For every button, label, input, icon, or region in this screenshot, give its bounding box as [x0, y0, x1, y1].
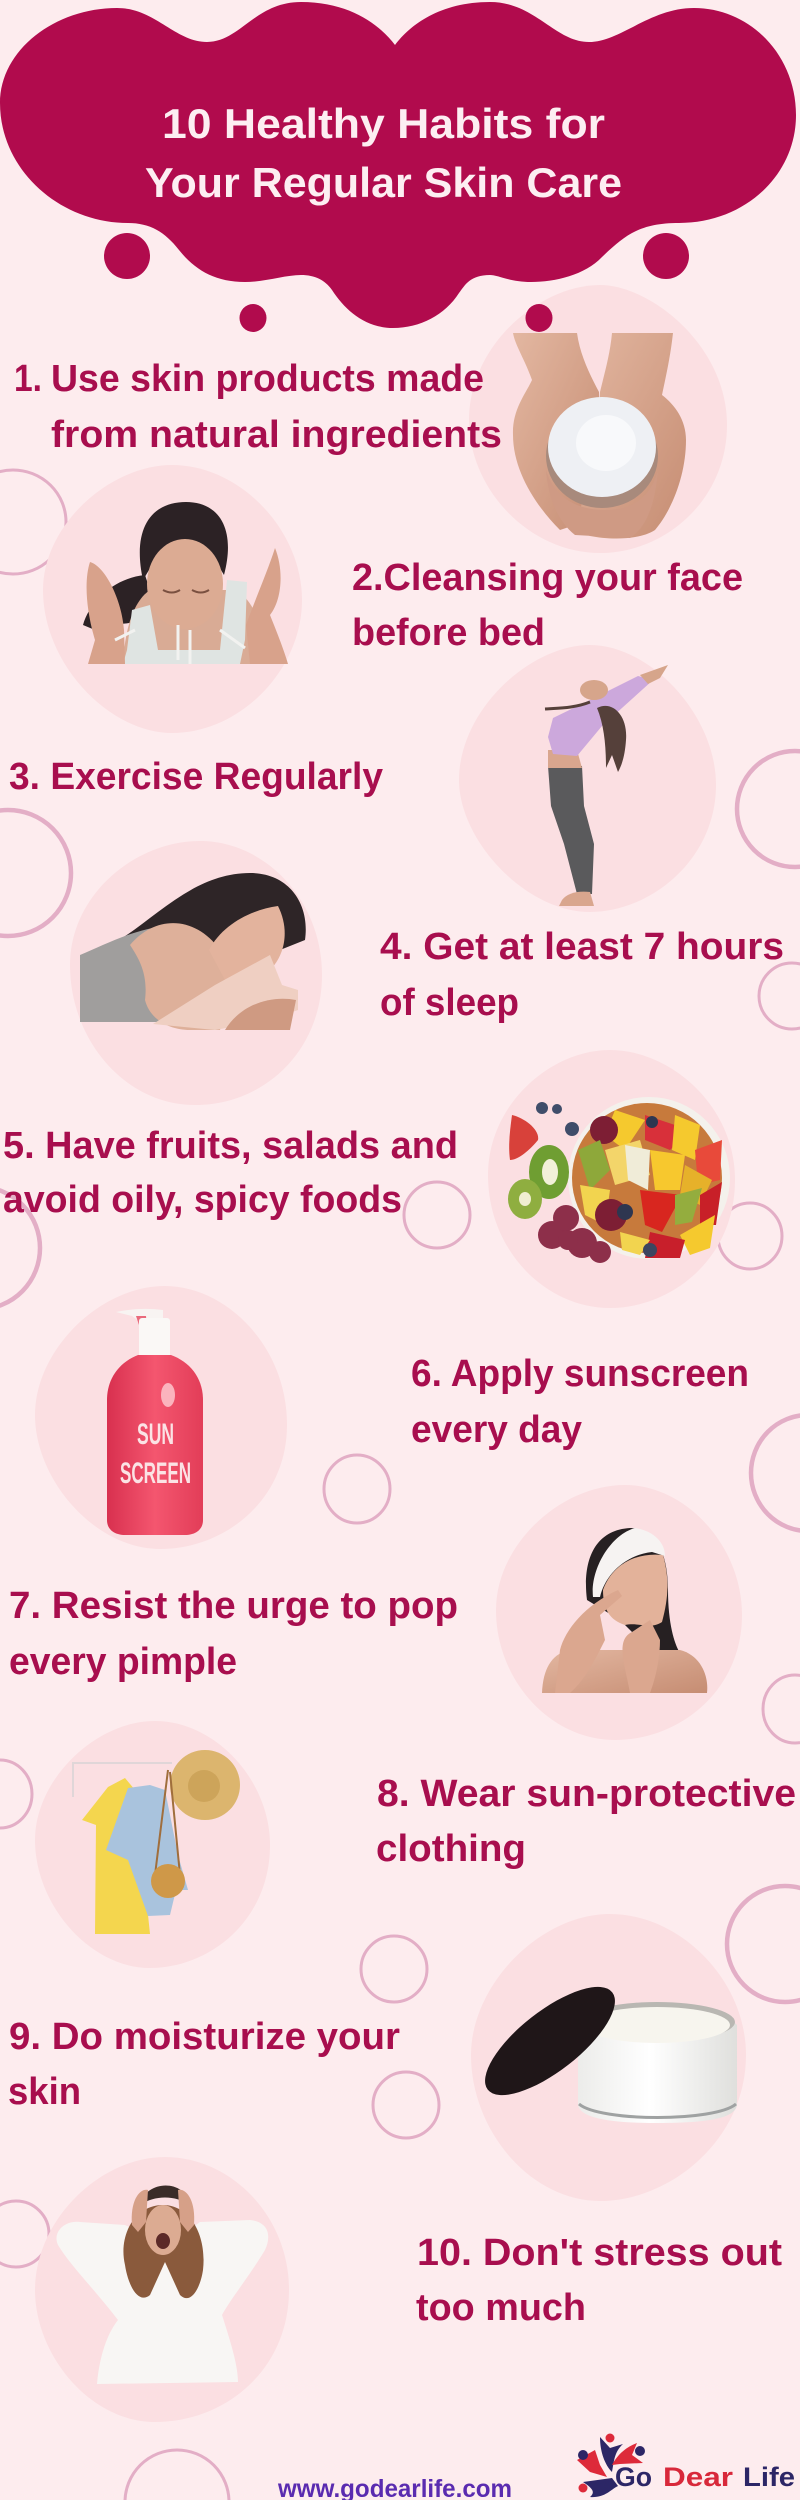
- panel: habit 3 exercise: [9, 645, 716, 912]
- icon: woman with headband: [542, 1528, 707, 1693]
- habit 10 text: 10. Don't stress out: [417, 2232, 782, 2274]
- blue dress: [106, 1785, 188, 1916]
- icon: fruit bowl: [508, 1097, 730, 1263]
- habit 2 text: [352, 557, 743, 654]
- habit 1 text: 1.: [14, 358, 42, 400]
- habit 4 text: [380, 926, 784, 1024]
- tank top: [123, 580, 247, 664]
- hands on head: [132, 2190, 194, 2232]
- hair: [110, 873, 306, 960]
- habit 1 text: Use skin products made: [51, 358, 484, 400]
- title text: 10 Healthy Habits for: [162, 100, 605, 147]
- logo: Go Dear Life: Go: [615, 2462, 652, 2492]
- gray top: [80, 925, 170, 1022]
- panel: habit 7 pimple: [9, 1485, 742, 1740]
- habit 9 text: skin: [8, 2071, 81, 2113]
- cloud droplets: [104, 233, 689, 332]
- pillow: [153, 955, 298, 1030]
- blob background: [35, 1286, 287, 1549]
- habit 9 text: [8, 2016, 400, 2113]
- kiwi slices: [529, 1145, 569, 1199]
- blob background: [35, 1721, 270, 1968]
- chest: [123, 590, 263, 664]
- habit 6 text: every day: [411, 1409, 582, 1451]
- panel: habit 9 moisturize: [8, 1914, 746, 2201]
- ponytail: [83, 575, 160, 630]
- habit 6 text: 6. Apply sunscreen: [411, 1353, 749, 1395]
- habit 7 text: 7. Resist the urge to pop: [9, 1585, 458, 1627]
- shoulders: [542, 1650, 707, 1693]
- bowl: [568, 1097, 730, 1259]
- habit 2 text: 2.Cleansing your face: [352, 557, 743, 599]
- icon: sleeping woman: [80, 873, 306, 1030]
- strawberry: [509, 1115, 538, 1160]
- feet: [559, 892, 594, 906]
- hands: [87, 562, 125, 664]
- panel: habit 2 cleansing: [43, 465, 743, 733]
- habit 4 text: of sleep: [380, 982, 519, 1024]
- habit 5 text: 5. Have fruits, salads and: [3, 1125, 458, 1167]
- habit 10 text: too much: [416, 2287, 586, 2329]
- head: [580, 680, 608, 700]
- habit 1 text: [14, 358, 502, 456]
- headband: [593, 1528, 665, 1597]
- blob background: [496, 1485, 742, 1740]
- logo: Go Dear Life: Dear: [663, 2462, 734, 2492]
- blueberries: [536, 1102, 579, 1136]
- hair: [597, 706, 626, 772]
- arm: [225, 999, 296, 1030]
- habit 10 text: [416, 2232, 782, 2329]
- straw hat: [170, 1750, 240, 1820]
- hair: [586, 1528, 680, 1653]
- habit 3 text: 3. Exercise Regularly: [9, 756, 383, 798]
- blob background: [43, 465, 302, 733]
- blob background: [70, 841, 322, 1105]
- blob background: [469, 285, 727, 553]
- cloud shape: [0, 2, 796, 328]
- icon: clothes rail with hat and bag: [73, 1750, 240, 1934]
- panel: habit 5 fruits: [3, 1050, 735, 1308]
- bag: [155, 1770, 180, 1875]
- panel: habit 10 stress: [35, 2157, 782, 2422]
- habit 5 text: avoid oily, spicy foods: [3, 1179, 402, 1221]
- hair: [140, 502, 228, 580]
- habit 7 text: every pimple: [9, 1641, 237, 1683]
- logo: Go Dear Life: [577, 2434, 795, 2497]
- face: [145, 2205, 181, 2255]
- icon: sunscreen bottle: SCREEN: [120, 1457, 191, 1490]
- title cloud banner: [0, 2, 796, 332]
- grapes: [538, 1205, 611, 1263]
- habit 1 text: from natural ingredients: [51, 414, 502, 456]
- hands: [555, 1590, 622, 1693]
- icon: woman stretching: [545, 665, 668, 906]
- habit 7 text: [9, 1585, 458, 1683]
- panel: habit 8 clothing: [35, 1721, 796, 1968]
- water splash: [115, 625, 245, 664]
- yellow dress: [82, 1778, 150, 1934]
- shoulder: [130, 923, 228, 1030]
- icon: open cream jar: [469, 1969, 737, 2123]
- face: [147, 539, 223, 629]
- blob background: [488, 1050, 735, 1308]
- title text: Your Regular Skin Care: [145, 159, 622, 206]
- habit 4 text: 4. Get at least 7 hours: [380, 926, 784, 968]
- habit 2 text: before bed: [352, 612, 545, 654]
- title text: [145, 100, 622, 206]
- blob background: [35, 2157, 289, 2422]
- blob background: [471, 1914, 746, 2201]
- hands: [640, 665, 668, 684]
- face: [603, 1555, 667, 1626]
- habit 8 text: [376, 1773, 796, 1870]
- leggings: [548, 766, 594, 894]
- blob background: [459, 645, 716, 912]
- midriff: [548, 750, 582, 768]
- habit 8 text: clothing: [376, 1828, 526, 1870]
- panel: habit 6 sunscreen: [35, 1286, 749, 1549]
- sweater: [57, 2220, 268, 2384]
- habit 8 text: 8. Wear sun-protective: [377, 1773, 796, 1815]
- decorative large ring outlines: [0, 751, 800, 2002]
- panel: habit 1 natural products: [14, 285, 727, 553]
- icon: sunscreen bottle: [107, 1309, 203, 1535]
- face: [209, 906, 285, 982]
- top of hair: [140, 2185, 190, 2205]
- habit 5 text: [3, 1125, 458, 1221]
- panel: habit 4 sleep: [70, 841, 784, 1105]
- lilac top: [548, 676, 653, 756]
- logo mark: [577, 2434, 645, 2497]
- icon: hands holding cream jar: [513, 333, 686, 538]
- icon: woman washing face: [83, 502, 288, 664]
- logo: Go Dear Life: Life: [743, 2462, 795, 2492]
- hair: [123, 2205, 204, 2298]
- icon: sunscreen bottle: SUN: [137, 1418, 174, 1451]
- fruit pieces: [578, 1110, 722, 1258]
- habit 6 text: [411, 1353, 749, 1451]
- icon: stressed woman: [57, 2185, 268, 2384]
- habit 9 text: 9. Do moisturize your: [9, 2016, 400, 2058]
